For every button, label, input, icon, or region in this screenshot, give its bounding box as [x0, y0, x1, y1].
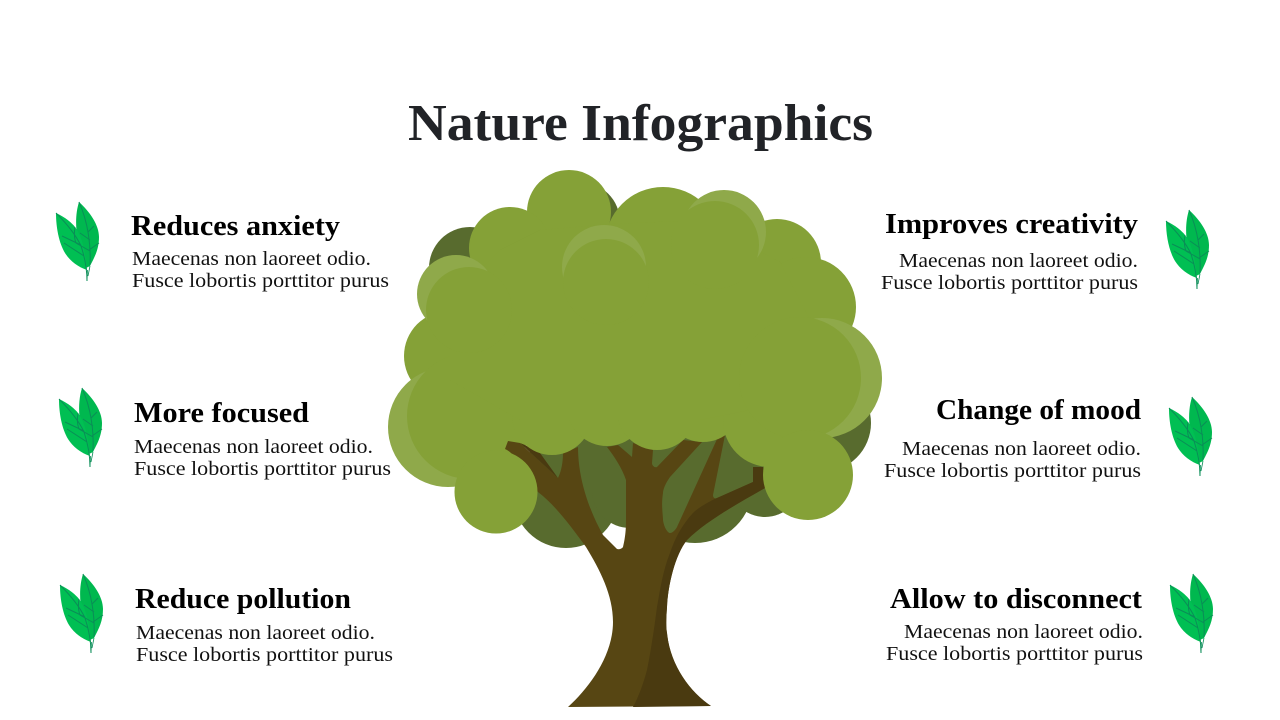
icon: leaf [1166, 210, 1209, 289]
text block [881, 250, 1138, 294]
heading: Improves creativity [885, 208, 1139, 240]
icon: leaf [56, 202, 99, 281]
text block: Fusce lobortis porttitor purus [886, 643, 1143, 665]
text block: Maecenas non laoreet odio. [136, 622, 375, 644]
item: Reduces anxiety [56, 202, 389, 292]
tree: lower foliage clusters [454, 430, 853, 534]
item: Change of mood [884, 394, 1212, 482]
text block: Fusce lobortis porttitor purus [881, 272, 1138, 294]
tree: big left foliage with crescent [388, 311, 533, 487]
icon: leaf [60, 574, 103, 653]
text block: Maecenas non laoreet odio. [134, 436, 373, 458]
text block: Fusce lobortis porttitor purus [132, 270, 389, 292]
text block: Fusce lobortis porttitor purus [136, 644, 393, 666]
text block: Maecenas non laoreet odio. [904, 621, 1143, 643]
heading: Reduce pollution [135, 583, 351, 615]
text block: Fusce lobortis porttitor purus [884, 460, 1141, 482]
illustration: tree [388, 170, 882, 707]
item: More focused [59, 388, 391, 480]
tree: dark back foliage [429, 182, 871, 548]
text block: Maecenas non laoreet odio. [902, 438, 1141, 460]
icon: leaf [1169, 397, 1212, 476]
tree: trunk and branches [505, 435, 765, 707]
text block: Maecenas non laoreet odio. [899, 250, 1138, 272]
tree: main canopy [450, 170, 856, 467]
text block [886, 621, 1143, 665]
text block: Fusce lobortis porttitor purus [134, 458, 391, 480]
icon: leaf [59, 388, 102, 467]
text block [134, 436, 391, 480]
item: Improves creativity [881, 208, 1209, 294]
heading: Change of mood [936, 394, 1141, 426]
heading: More focused [134, 397, 309, 429]
text block [136, 622, 393, 666]
text block [132, 248, 389, 292]
heading: Reduces anxiety [131, 210, 341, 242]
text block: Maecenas non laoreet odio. [132, 248, 371, 270]
tree: crescent highlights [417, 190, 882, 439]
icon: leaf [1170, 574, 1213, 653]
title: Nature Infographics [408, 95, 873, 152]
tree: trunk shadow [520, 443, 765, 707]
item: Allow to disconnect [886, 574, 1213, 665]
item: Reduce pollution [60, 574, 393, 666]
text block [884, 438, 1141, 482]
heading: Allow to disconnect [890, 583, 1142, 615]
